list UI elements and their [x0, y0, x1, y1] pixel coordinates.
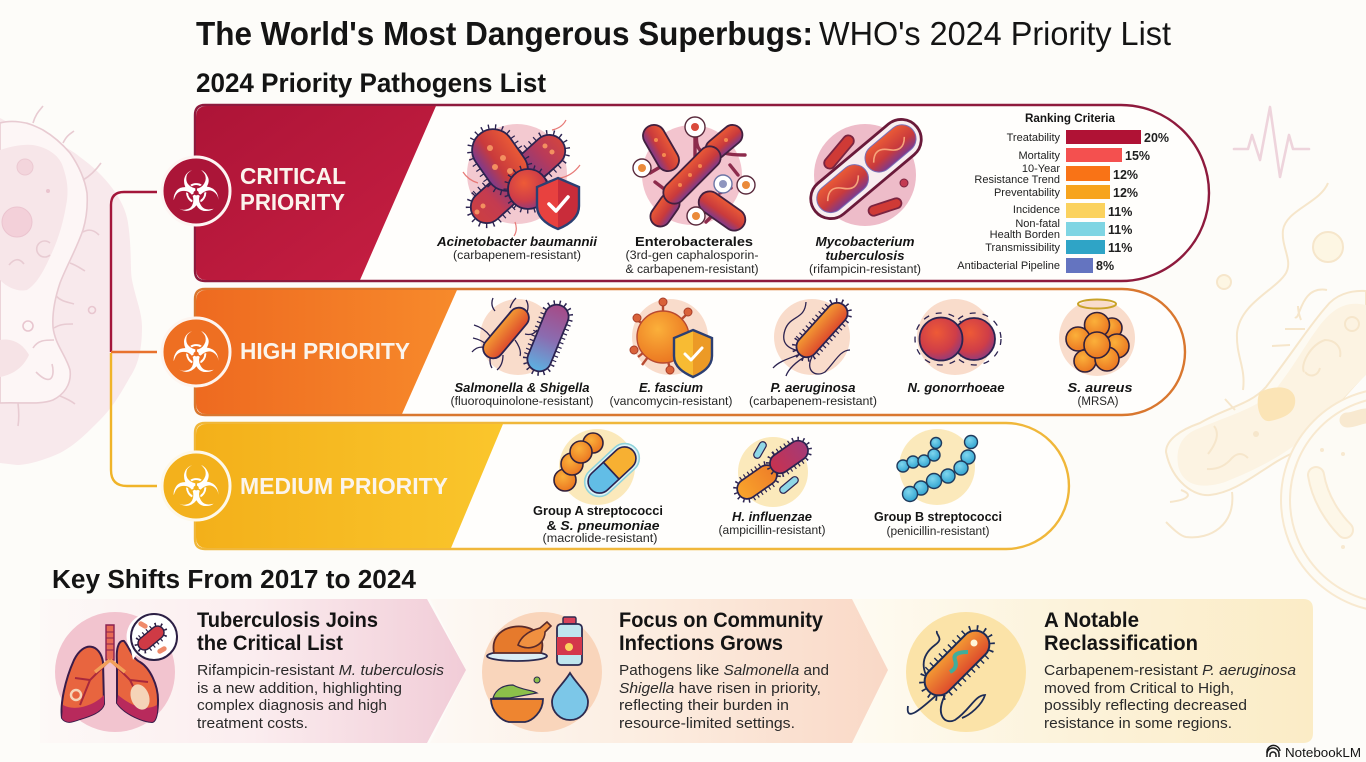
pathogen: P. aeruginosa [773, 298, 852, 376]
logo: NotebookLM: NotebookLM [1285, 746, 1361, 760]
pathogen: Acinetobacter baumannii [463, 120, 580, 236]
background: cream bacteria illustration [1166, 183, 1366, 612]
text: community card: Pathogens like Salmonella and [619, 662, 829, 679]
text: reclassification card [1044, 608, 1296, 732]
label: Group A streptococci & S. pneumoniae: (macrolide-resistant) [542, 531, 658, 545]
title: WHO's 2024 Priority List [819, 15, 1171, 52]
text: tuberculosis card: complex diagnosis and high [197, 697, 387, 714]
biohazard badge: critical: ☣ [171, 160, 221, 225]
background: pink cell illustration [0, 106, 142, 465]
label: P. aeruginosa: P. aeruginosa [770, 380, 856, 395]
label: S. aureus: S. aureus [1068, 380, 1132, 395]
pathogen: H. influenzae [733, 437, 812, 507]
label: Mycobacterium tuberculosis [809, 234, 921, 276]
title [196, 15, 1171, 52]
bar: incidence 11%: 11% [1108, 205, 1132, 219]
icon: p. aeruginosa bacterium [908, 625, 995, 721]
icon: lungs with bacterium [62, 613, 177, 722]
connector lines between priority tiers [111, 192, 157, 486]
text: community card: Infections Grows [619, 631, 783, 655]
label: medium priority: MEDIUM PRIORITY [240, 473, 448, 499]
label: H. influenzae: (ampicillin-resistant) [718, 523, 826, 537]
biohazard badge: high: ☣ [171, 321, 221, 386]
label: Mycobacterium tuberculosis: Mycobacterium [816, 234, 915, 249]
pathogen: Group A streptococci & S. pneumoniae [554, 429, 645, 505]
label: Mycobacterium tuberculosis: (rifampicin-resistant) [809, 262, 921, 276]
label: Group A streptococci & S. pneumoniae: & S. pneumoniae [546, 518, 660, 533]
label: H. influenzae: H. influenzae [732, 509, 812, 524]
text: reclassification card: Reclassification [1044, 631, 1198, 655]
text: community card: Shigella have risen in priority, [619, 680, 821, 697]
pathogen: N. gonorrhoeae [915, 299, 1001, 375]
bar: non-fatal health borden 11%: Non-fatal [1015, 218, 1060, 230]
label: Salmonella & Shigella [450, 380, 594, 408]
heading: priority pathogens: 2024 Priority Pathogens List [196, 68, 546, 98]
label: Acinetobacter baumannii: (carbapenem-resistant) [453, 248, 581, 262]
card: tuberculosis joins the critical list [40, 599, 466, 743]
bar: mortality 15%: 15% [1125, 149, 1150, 163]
bar: transmissibility 11%: Transmissibility [985, 242, 1060, 254]
background: heartbeat line [1234, 107, 1309, 177]
label: Salmonella & Shigella: Salmonella & Shigella [454, 380, 590, 395]
label: critical priority: CRITICAL [240, 163, 346, 189]
critical banner [196, 106, 436, 280]
label: critical priority [240, 163, 346, 215]
label: Group A streptococci & S. pneumoniae: Group A streptococci [533, 503, 663, 518]
label: E. fascium: E. fascium [639, 380, 703, 395]
bar: transmissibility 11%: 11% [1108, 241, 1132, 255]
label: Enterobacterales: (3rd-gen caphalosporin- [626, 248, 758, 262]
bar: antibacterial pipeline 8%: 8% [1096, 259, 1114, 273]
label: N. gonorrhoeae: N. gonorrhoeae [908, 380, 1004, 395]
label: Acinetobacter baumannii: Acinetobacter baumannii [436, 234, 597, 249]
panel: high priority [162, 289, 1185, 415]
label: E. fascium: (vancomycin-resistant) [610, 394, 732, 408]
label: H. influenzae [718, 509, 826, 537]
chart: ranking criteria [957, 113, 1169, 273]
pathogen: Enterobacterales [633, 117, 755, 235]
bar: incidence 11% [1013, 203, 1132, 219]
medium banner [196, 424, 503, 548]
card: focus on community infections grows [430, 599, 888, 743]
bar: non-fatal health borden 11%: 11% [1108, 223, 1132, 237]
text: reclassification card: A Notable [1044, 608, 1139, 632]
bar: antibacterial pipeline 8% [957, 258, 1114, 273]
label: S. aureus [1068, 380, 1132, 408]
pathogen: Group B streptococci [897, 429, 978, 505]
bar: preventability 12%: 12% [1113, 186, 1138, 200]
label: Enterobacterales [626, 234, 758, 276]
icon: orange shield [674, 330, 712, 377]
label: Group B streptococci: (penicillin-resistant) [886, 524, 990, 538]
text: tuberculosis card: treatment costs. [197, 715, 308, 732]
title: The World's Most Dangerous Superbugs: [196, 15, 813, 52]
pathogen: Mycobacterium tuberculosis [803, 111, 929, 227]
label: critical priority: PRIORITY [240, 189, 345, 215]
label: Enterobacterales: & carbapenem-resistant) [626, 262, 758, 276]
text: tuberculosis card [197, 608, 445, 732]
bar: resistance trend 12%: Resistance Trend [974, 174, 1060, 186]
label: P. aeruginosa: (carbapenem-resistant) [749, 394, 877, 408]
bar: non-fatal health borden 11% [990, 218, 1132, 241]
panel: medium priority [162, 423, 1069, 549]
label: S. aureus: (MRSA) [1078, 394, 1118, 408]
pathogen: S. aureus [1059, 300, 1135, 376]
label: E. fascium [610, 380, 732, 408]
label: Salmonella & Shigella: (fluoroquinolone-resistant) [450, 394, 594, 408]
text: reclassification card: resistance in some regions. [1044, 715, 1232, 732]
text: community card [619, 608, 829, 732]
card: a notable reclassification [852, 599, 1313, 743]
text: tuberculosis card: the Critical List [197, 631, 343, 655]
text: reclassification card: possibly reflecting decreased [1044, 697, 1247, 714]
bar: antibacterial pipeline 8%: Antibacterial Pipeline [957, 260, 1060, 272]
chart title: Ranking Criteria [1025, 113, 1116, 125]
text: tuberculosis card: is a new addition, highlighting [197, 680, 402, 697]
bar: resistance trend 12%: 12% [1113, 168, 1138, 182]
label: Group B streptococci [874, 509, 1002, 538]
bar: mortality 15% [1018, 148, 1150, 163]
pathogen: Salmonella & Shigella [472, 298, 572, 375]
biohazard badge: medium: ☣ [171, 455, 221, 520]
label: Mycobacterium tuberculosis: tuberculosis [826, 248, 904, 263]
text: reclassification card: moved from Critical to High, [1044, 680, 1234, 697]
label: Group B streptococci: Group B streptococci [874, 509, 1002, 524]
bar: transmissibility 11% [985, 240, 1132, 255]
text: community card: reflecting their burden in [619, 697, 789, 714]
high banner [196, 290, 457, 414]
bar: treatability 20%: 20% [1144, 131, 1169, 145]
bar: resistance trend 12%: 10-Year [1022, 163, 1060, 175]
label: Enterobacterales: Enterobacterales [635, 234, 753, 249]
label: P. aeruginosa [749, 380, 877, 408]
panel: critical priority [162, 105, 1209, 281]
bar: treatability 20% [1007, 130, 1169, 145]
icon: food, bottle, bowl and water [487, 617, 588, 722]
bar: resistance trend 12% [974, 163, 1138, 186]
text: community card: resource-limited settings. [619, 715, 795, 732]
bar: mortality 15%: Mortality [1018, 150, 1060, 162]
label: Group A streptococci & S. pneumoniae [533, 503, 663, 545]
text: tuberculosis card: Rifampicin-resistant M. tuberculosis [197, 662, 445, 679]
bar: non-fatal health borden 11%: Health Borden [990, 229, 1060, 241]
heading: key shifts: Key Shifts From 2017 to 2024 [52, 566, 417, 594]
bar: preventability 12% [994, 185, 1138, 200]
pathogen: E. fascium [630, 298, 712, 377]
bar: treatability 20%: Treatability [1007, 132, 1060, 144]
bar: incidence 11%: Incidence [1013, 204, 1060, 216]
bar: preventability 12%: Preventability [994, 187, 1060, 199]
text: reclassification card: Carbapenem-resistant P. aeruginosa [1044, 662, 1296, 679]
label: Acinetobacter baumannii [436, 234, 597, 262]
text: community card: Focus on Community [619, 608, 823, 632]
label: high priority: HIGH PRIORITY [240, 338, 410, 364]
icon: red shield [537, 178, 579, 229]
text: tuberculosis card: Tuberculosis Joins [197, 608, 378, 632]
